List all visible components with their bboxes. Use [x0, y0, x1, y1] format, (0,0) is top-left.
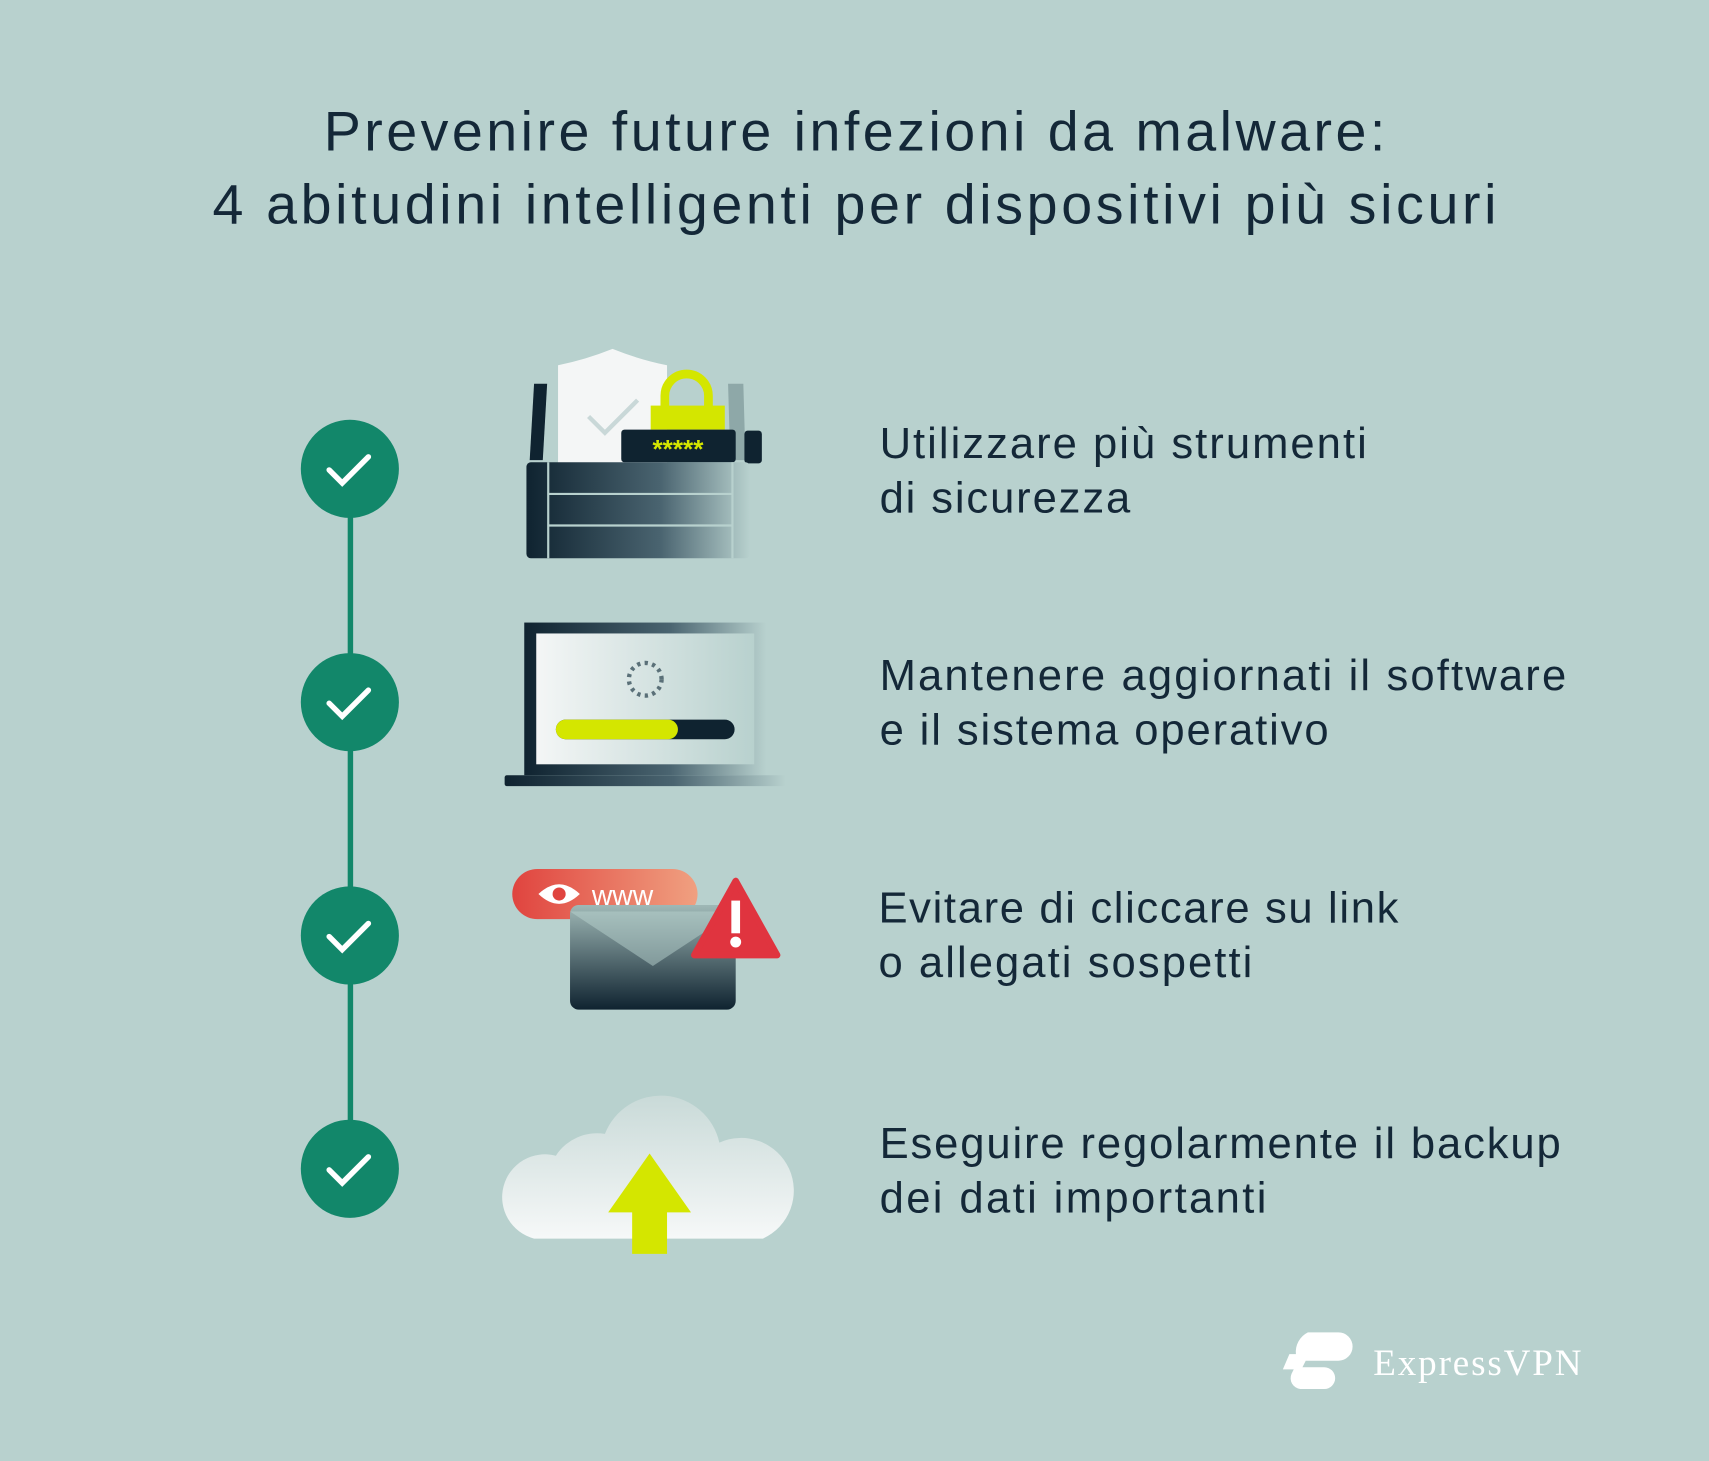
text: step 1: di sicurezza [880, 474, 1131, 522]
icon: toolbox with shield and lock: ***** [652, 434, 704, 464]
text: step 3 [878, 884, 1399, 987]
icon: toolbox with shield and lock [526, 349, 762, 558]
text: step 2: e il sistema operativo [880, 707, 1329, 755]
logo [1283, 1332, 1581, 1389]
text: step 4 [880, 1120, 1561, 1222]
title: 4 abitudini intelligenti per dispositivi più sicuri [213, 174, 1496, 236]
icon: laptop update [505, 623, 786, 786]
logo: ExpressVPN [1373, 1343, 1581, 1384]
text: step 4: Eseguire regolarmente il backup [880, 1120, 1561, 1168]
icon: cloud upload [502, 1096, 794, 1254]
title: Prevenire future infezioni da malware: [324, 100, 1385, 162]
step 4 check circle [301, 1120, 399, 1218]
step 1 check circle [301, 420, 399, 518]
icon: envelope with www and warning: www [591, 880, 654, 912]
text: step 3: Evitare di cliccare su link [878, 884, 1399, 932]
timeline line [348, 469, 353, 1169]
title [213, 100, 1496, 236]
text: step 1 [880, 420, 1367, 522]
text: step 2: Mantenere aggiornati il software [880, 652, 1566, 700]
text: step 4: dei dati importanti [880, 1174, 1266, 1222]
step 2 check circle [301, 653, 399, 751]
step 3 check circle [301, 886, 399, 985]
icon: envelope with www and warning [512, 869, 777, 1010]
text: step 1: Utilizzare più strumenti [880, 420, 1367, 468]
text: step 2 [880, 652, 1566, 755]
text: step 3: o allegati sospetti [878, 939, 1252, 987]
